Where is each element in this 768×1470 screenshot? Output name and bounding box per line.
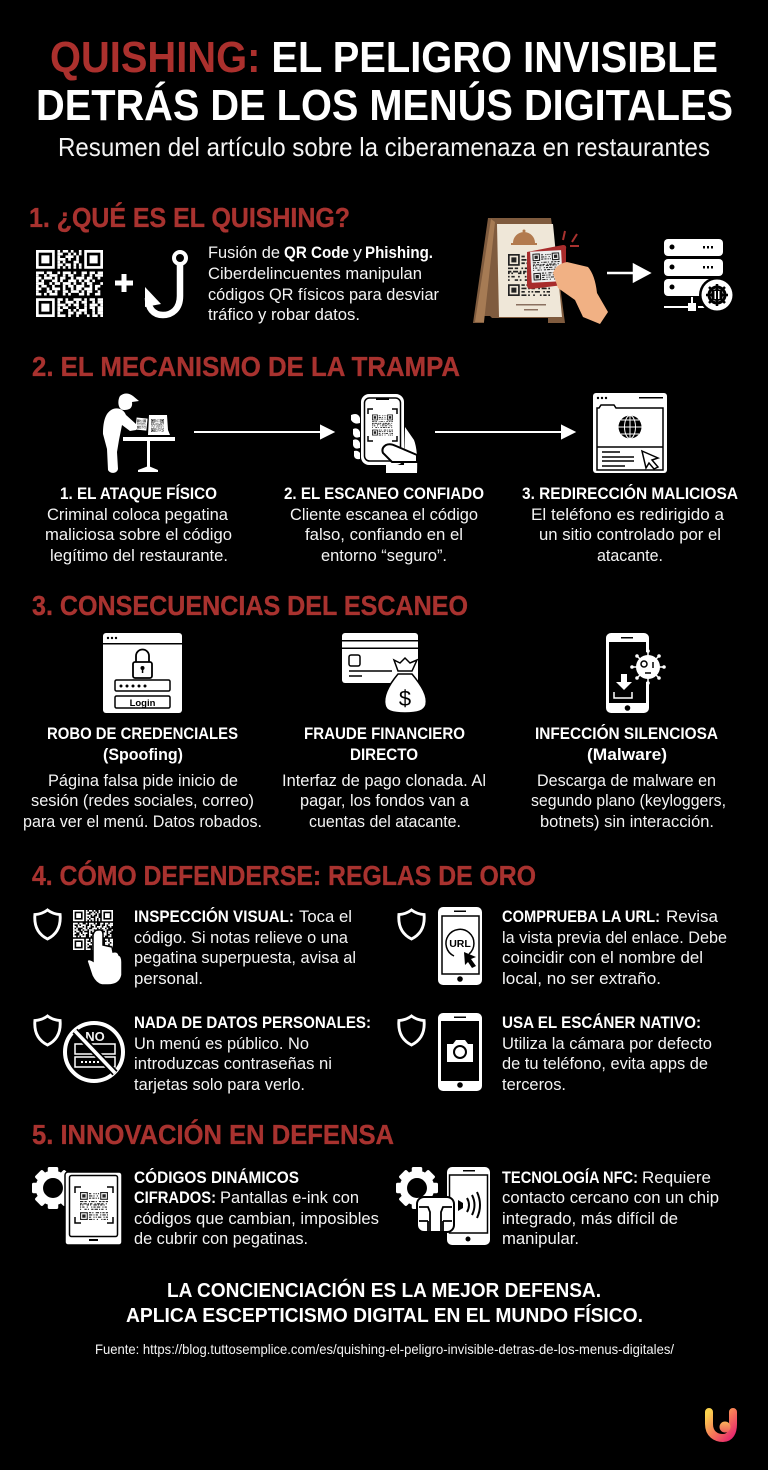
closing message [126,1278,643,1327]
icon: hand holding phone scanning QR [351,394,417,473]
text: visual inspection: código. Si notas relieve o una [134,928,349,947]
step 1 text: legítimo del restaurante. [50,546,228,565]
heading: section 1: 1. ¿QUÉ ES EL QUISHING? [29,202,350,233]
text: NFC: Requiere [642,1168,711,1187]
icon: fish hook [145,252,186,315]
text: definition: QR Code [284,243,349,262]
consequence 3 text: (Malware) [587,745,667,764]
text: dynamic codes [134,1168,379,1248]
text: native scanner: terceros. [502,1075,566,1094]
step 2 text: 2. EL ESCANEO CONFIADO [284,484,484,503]
icon: gear and e-ink tablet [32,1167,122,1245]
step 1 text: Criminal coloca pegatina [47,505,229,524]
icon: QR code [36,251,103,316]
text: dynamic codes: códigos que cambian, imposibles [134,1209,379,1228]
text: definition: Fusión de [208,243,280,262]
step 3 text: El teléfono es redirigido a [531,505,725,524]
text: definition: tráfico y robar datos. [208,305,360,324]
text: NFC [502,1168,719,1248]
step 1 text: 1. EL ATAQUE FÍSICO [60,484,217,503]
illustration: menu board with sticker and hand [473,218,608,324]
text: native scanner [502,1013,712,1094]
consequence 3 text: Descarga de malware en [537,771,716,790]
text: visual inspection: Toca el [299,907,352,926]
text: NFC: integrado, más difícil de [502,1209,678,1228]
consequence 1 text: sesión (redes sociales, correo) [31,791,254,810]
consequence 3 text: segundo plano (keyloggers, [531,791,726,810]
consequence 2 text: Interfaz de pago clonada. Al [282,771,486,790]
icon: credit card and money bag [342,633,426,713]
step 2 text: Cliente escanea el código [290,505,478,524]
icon: shield and no personal data: NO [85,1029,105,1044]
step 1 text [45,484,232,565]
text: check URL: COMPRUEBA LA URL: [502,907,660,926]
text: check URL: Revisa [666,907,719,926]
text: native scanner: de tu teléfono, evita apps de [502,1054,708,1073]
icon: credit card and money bag: $ [399,686,411,711]
step 2 text [284,484,484,565]
source: Fuente: https://blog.tuttosemplice.com/es/quishing-el-peligro-invisible-detras-de-los-menus-digitales/ [95,1341,674,1357]
step 2 text: falso, confiando en el [305,525,463,544]
consequence 1 text: ROBO DE CREDENCIALES [47,724,238,743]
text: no personal data: introduzcas contraseñas ni [134,1054,332,1073]
heading: section 5: 5. INNOVACIÓN EN DEFENSA [32,1119,394,1150]
text: definition: códigos QR físicos para desviar [208,285,439,304]
consequence 3 text: INFECCIÓN SILENCIOSA [535,724,718,743]
text: visual inspection: personal. [134,969,203,988]
icon: shield and URL phone [399,907,482,985]
consequence 2 text: pagar, los fondos van a [300,791,470,810]
text: definition: Ciberdelincuentes manipulan [208,264,422,283]
consequence 2 text [282,724,486,831]
icon: shield and no personal data [35,1016,123,1081]
title [36,33,733,130]
text: definition [208,243,439,324]
text: NFC: manipular. [502,1229,579,1248]
closing message: LA CONCIENCIACIÓN ES LA MEJOR DEFENSA. [167,1278,601,1302]
arrow: step 1 to 2 [194,426,333,438]
text: check URL [502,907,727,988]
arrow: to server [607,265,649,281]
icon: fake login page: Login [130,698,156,709]
icon: person placing sticker on table menu [103,394,175,473]
subtitle: Resumen del artículo sobre la ciberamenaza en restaurantes [58,132,710,162]
step 2 text: entorno “seguro”. [321,546,447,565]
step 3 text [522,484,738,565]
consequence 2 text: DIRECTO [350,745,418,764]
text: dynamic codes: CIFRADOS: [134,1188,216,1207]
text: visual inspection: INSPECCIÓN VISUAL: [134,907,294,926]
step 1 text: maliciosa sobre el código [45,525,232,544]
icon: fake login page [103,633,182,713]
text: check URL: coincidir con el nombre del [502,948,703,967]
icon: browser with globe and cursor [593,393,667,473]
consequence 1 text: (Spoofing) [103,745,183,764]
icon: server with malware gear [664,239,735,313]
text: dynamic codes: de cubrir con pegatinas. [134,1229,308,1248]
step 3 text: atacante. [597,546,663,565]
title: QUISHING: EL PELIGRO INVISIBLE [50,33,718,82]
consequence 3 text [531,724,726,831]
consequence 1 text: para ver el menú. Datos robados. [23,812,262,831]
icon: phone with malware download [606,633,666,713]
text: NFC: contacto cercano con un chip [502,1188,719,1207]
text: no personal data: NADA DE DATOS PERSONALES: [134,1013,371,1032]
text: visual inspection [134,907,356,988]
consequence 2 text: cuentas del atacante. [309,812,461,831]
icon: plus [115,274,133,292]
text: native scanner: Utiliza la cámara por defecto [502,1034,712,1053]
consequence 1 text: Página falsa pide inicio de [48,771,238,790]
logo [709,1412,733,1438]
icon: shield and QR touch [35,910,122,985]
text: no personal data [134,1013,371,1094]
consequence 3 text: botnets) sin interacción. [540,812,714,831]
heading: section 4: 4. CÓMO DEFENDERSE: REGLAS DE ORO [32,860,536,891]
text: check URL: local, no ser extraño. [502,969,661,988]
text: no personal data: tarjetas solo para verlo. [134,1075,305,1094]
text: dynamic codes: CÓDIGOS DINÁMICOS [134,1168,299,1187]
text: no personal data: Un menú es público. No [134,1034,309,1053]
consequence 1 text [23,724,262,831]
heading: section 3: 3. CONSECUENCIAS DEL ESCANEO [32,590,468,621]
text: definition: y [353,243,363,262]
closing message: APLICA ESCEPTICISMO DIGITAL EN EL MUNDO FÍSICO. [126,1304,643,1327]
text: dynamic codes: Pantallas e-ink con [220,1188,359,1207]
consequence 2 text: FRAUDE FINANCIERO [304,724,465,743]
icon: gear, chip and NFC phone [396,1167,490,1245]
text: NFC: TECNOLOGÍA NFC: [502,1168,638,1187]
text: check URL: la vista previa del enlace. Debe [502,928,727,947]
text: native scanner: USA EL ESCÁNER NATIVO: [502,1013,701,1032]
step 3 text: 3. REDIRECCIÓN MALICIOSA [522,484,738,503]
arrow: step 2 to 3 [435,426,574,438]
icon: shield and camera phone [399,1013,482,1091]
heading: section 2: 2. EL MECANISMO DE LA TRAMPA [32,351,460,382]
text: definition: Phishing. [365,243,433,262]
step 3 text: un sitio controlado por el [539,525,721,544]
text: visual inspection: pegatina superpuesta, avisa al [134,948,356,967]
icon: shield and URL phone: URL [449,938,471,950]
